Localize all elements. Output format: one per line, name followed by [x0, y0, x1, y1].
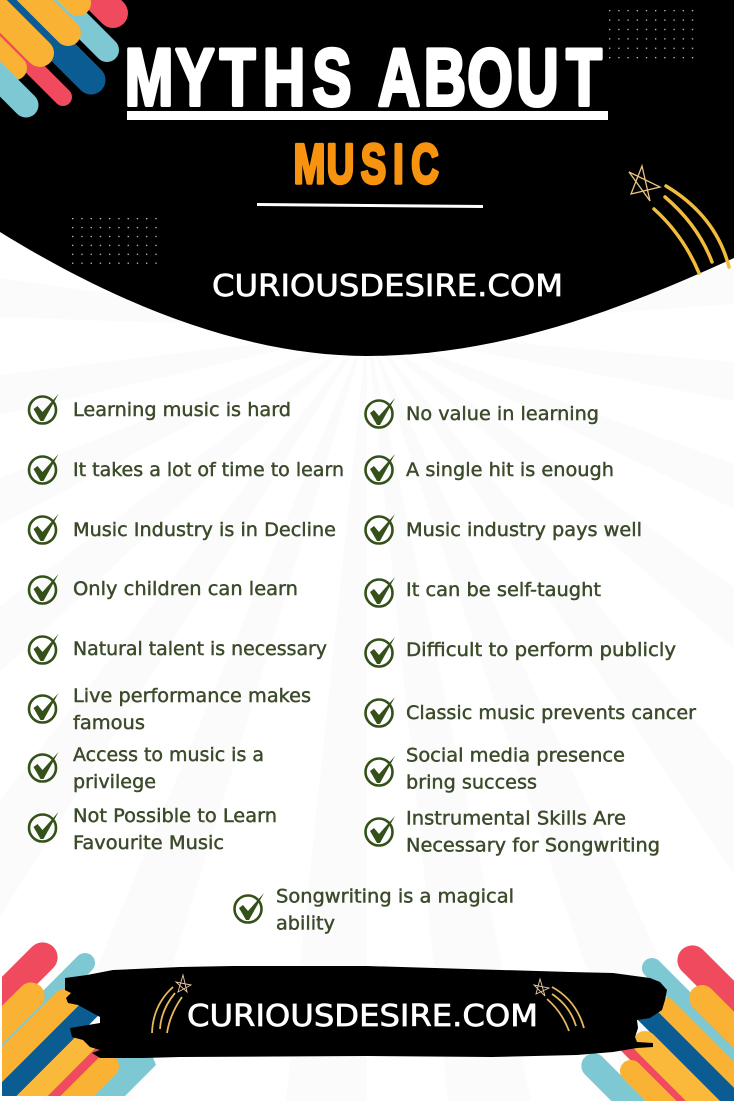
item: it takes a lot of time: It takes a lot of time to learn [73, 459, 344, 481]
item: music industry in decline: Music Industry is in Decline [73, 519, 336, 541]
black header panel [0, 0, 734, 356]
item: pays well: Music industry pays well [406, 519, 642, 541]
item: live performance [29, 685, 311, 734]
item: not possible: Favourite Music [73, 832, 224, 854]
item: access to music: Access to music is a [73, 744, 264, 766]
item: songwriting centred [234, 886, 514, 934]
item: no value: No value in learning [406, 403, 599, 425]
item: natural talent: Natural talent is necessary [73, 638, 327, 660]
item: instrumental skills: Necessary for Songwriting [406, 834, 660, 856]
decoration: top-left colour stripes [0, 0, 113, 105]
item: access to music [29, 744, 264, 793]
decoration: bottom-left colour stripes [2, 942, 156, 1096]
item: classic music: Classic music prevents cancer [406, 702, 696, 724]
item: single hit: A single hit is enough [406, 459, 614, 481]
decoration: dot grid right [609, 10, 701, 60]
banner url: CURIOUSDESIRE.COM [187, 999, 538, 1034]
background sunburst rays [0, 265, 734, 1101]
item: perform publicly: Difficult to perform publicly [406, 639, 676, 661]
item: instrumental skills: Instrumental Skills Are [406, 808, 626, 830]
icon: shooting star top [629, 166, 729, 273]
item: natural talent [29, 634, 327, 664]
subtitle: MUSIC [294, 134, 439, 196]
item: music industry in decline [29, 514, 336, 544]
item: only children [29, 574, 298, 604]
item: not possible: Not Possible to Learn [73, 805, 277, 827]
decoration: bottom-right colour stripes [581, 945, 734, 1101]
item: self-taught [366, 577, 601, 606]
item: songwriting centred: Songwriting is a magical [276, 886, 514, 908]
item: single hit [366, 454, 614, 484]
item: songwriting centred: ability [276, 912, 335, 934]
item: perform publicly [366, 637, 676, 666]
item: no value [366, 398, 599, 428]
brush banner [65, 966, 667, 1058]
item: classic music [366, 697, 696, 726]
title: MYTHS ABOUT [125, 32, 602, 122]
myth list: right column [366, 398, 696, 856]
website url: CURIOUSDESIRE.COM [212, 269, 563, 304]
item: not possible [29, 805, 277, 854]
icon: shooting star banner right [534, 979, 584, 1031]
title underline [127, 111, 608, 120]
item: self-taught: It can be self-taught [406, 579, 601, 601]
item: social media [366, 744, 625, 794]
item: access to music: privilege [73, 771, 156, 793]
item: only children: Only children can learn [73, 578, 298, 600]
item: learning music is hard: Learning music is hard [73, 399, 291, 421]
icon: shooting star banner left [152, 975, 191, 1033]
item: learning music is hard [29, 394, 291, 424]
item: instrumental skills [366, 808, 660, 856]
myth list: left column [29, 394, 344, 854]
item: pays well [366, 514, 642, 544]
item: live performance: famous [73, 712, 145, 734]
item: live performance: Live performance makes [73, 685, 311, 707]
item: social media: Social media presence [406, 744, 625, 766]
item: it takes a lot of time [29, 454, 344, 484]
decoration: dot grid left [71, 217, 157, 265]
subtitle underline [257, 204, 483, 206]
item: social media: bring success [406, 772, 537, 794]
